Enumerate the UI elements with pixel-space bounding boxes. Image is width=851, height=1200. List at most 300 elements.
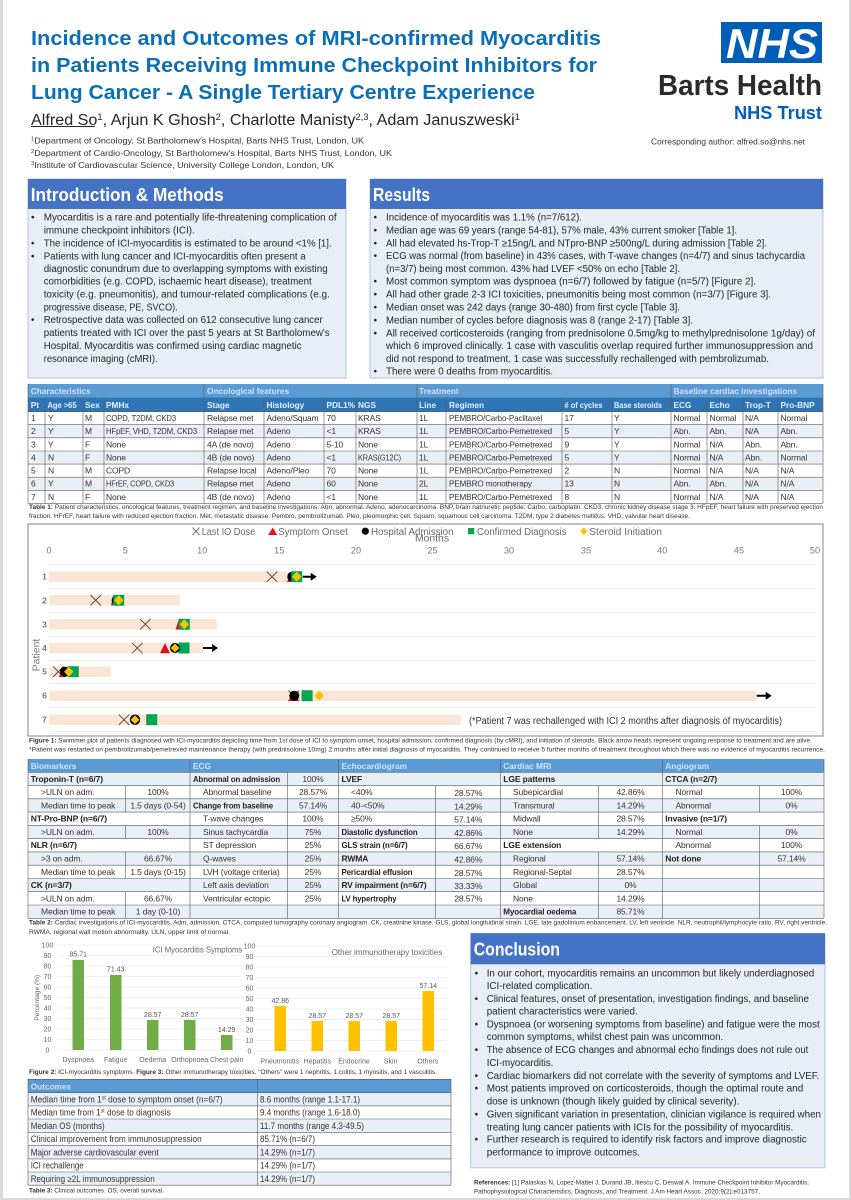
bullet list: conclusion: • bbox=[474, 994, 478, 1005]
bullet list: results bbox=[374, 213, 815, 378]
bar chart: other immunotherapy toxicities bbox=[244, 944, 447, 1066]
table 1 row: patient 2: N/A bbox=[745, 426, 759, 436]
table 1 row: patient 7: N/A bbox=[780, 492, 795, 502]
heading: conclusion: Conclusion bbox=[474, 940, 560, 960]
bullet list: results: Incidence of myocarditis was 1.1% (n=7/612). bbox=[386, 213, 582, 224]
bullet list: introduction: • bbox=[31, 213, 35, 224]
bullet list: introduction: • bbox=[31, 315, 35, 326]
swimmer row: patient 3 bbox=[49, 619, 217, 630]
bullet list: results: Median onset was 242 days (range 30-480) from first cycle [Table 3]. bbox=[386, 303, 680, 314]
table 1 row: patient 4: 4 bbox=[31, 452, 36, 462]
table 1 row: patient 3: 9 bbox=[564, 439, 570, 449]
table 1 group headers: Treatment bbox=[419, 386, 459, 396]
swimmer legend: Symptom Onset bbox=[278, 527, 348, 538]
table 2 column: ECG: Sinus tachycardia bbox=[203, 827, 268, 837]
table 2 column: echocardiogram: Diastolic dysfunction bbox=[342, 827, 418, 837]
table 2 column: cardiac MRI: LGE patterns bbox=[503, 774, 556, 784]
table 1 row: patient 6: 2L bbox=[419, 479, 429, 489]
table 1 column headers: PDL1% bbox=[326, 400, 356, 410]
table 1 row: patient 3: 1L bbox=[419, 439, 429, 449]
table 2 column: ECG bbox=[193, 774, 328, 903]
table 3 right column: 14.29% (n=1/7) bbox=[260, 1161, 315, 1171]
swimmer plot bbox=[28, 524, 823, 736]
bullet list: results: ECG was normal (from baseline) in 43% cases, with T-wave changes (n=4/7) and sinus tachycardia bbox=[386, 251, 805, 262]
table 1 row: patient 4: 5 bbox=[564, 452, 570, 462]
y axis labels chart 2: 30 bbox=[246, 1017, 253, 1024]
x axis labels: 20 bbox=[351, 546, 361, 556]
logo: NHS Barts Health: NHS bbox=[726, 20, 818, 67]
table 1 row: patient 7: N/A bbox=[710, 492, 724, 502]
table 1 row: patient 2: M bbox=[85, 426, 92, 436]
y axis labels: 2 bbox=[42, 595, 47, 605]
table 1 row: patient 6: N bbox=[614, 479, 620, 489]
table 1 row: patient 4: Y bbox=[614, 452, 620, 462]
table 3 header: Outcomes bbox=[31, 1082, 72, 1092]
table 1 row: patient 2: Abn. bbox=[674, 426, 691, 436]
table 1 row: patient 7: None bbox=[358, 492, 378, 502]
bullet list: conclusion: patient characteristics were varied. bbox=[487, 1007, 638, 1018]
swimmer row: patient 4 bbox=[49, 642, 218, 654]
table 2 column: cardiac MRI: LGE extension bbox=[503, 840, 561, 850]
table 2 section headers: Cardiac MRI bbox=[503, 761, 551, 771]
authors: 2,3 bbox=[355, 112, 369, 122]
bullet list: results: • bbox=[374, 367, 378, 378]
table 1 row: patient 7: 1L bbox=[419, 492, 429, 502]
table 2 column: biomarkers: 100% bbox=[147, 827, 169, 837]
table 1 row: patient 6: HFrEF, COPD, CKD3 bbox=[106, 479, 174, 489]
table 1 row: patient 5: Normal bbox=[674, 466, 700, 476]
bullet list: results: All had other grade 2-3 ICI toxicities, pneumonitis being most common (n=3/7) [Figure 3]. bbox=[386, 290, 771, 301]
y axis labels chart 1: 50 bbox=[44, 995, 51, 1002]
bullet list: conclusion: • bbox=[474, 1135, 478, 1146]
affiliations: 1 bbox=[31, 136, 34, 142]
bullet list: results: • bbox=[374, 277, 378, 288]
y axis labels: 6 bbox=[42, 691, 47, 701]
table 3 right column: 9.4 months (range 1.6-18.0) bbox=[260, 1108, 360, 1118]
bullet list: introduction: comorbidities (e.g. COPD, ischaemic heart disease), treatment bbox=[44, 277, 312, 288]
bullet list: conclusion: ICI-related complication. bbox=[487, 981, 592, 992]
table 1 row: patient 4: PEMBRO/Carbo-Pemetrexed bbox=[449, 452, 552, 462]
bullet list: conclusion: Further research is required to identify risk factors and improve diagnostic bbox=[487, 1135, 807, 1146]
table 2 column: angiogram: Normal bbox=[676, 787, 702, 797]
table 1 row: patient 6: 13 bbox=[564, 479, 574, 489]
table 1 row: patient 4: 4B (de novo) bbox=[207, 452, 255, 462]
table 1 row: patient 3: Normal bbox=[674, 439, 700, 449]
chart 2 category labels: Endocrine bbox=[338, 1058, 370, 1066]
table 2 column: ECG: 75% bbox=[305, 827, 322, 837]
table 2 column: echocardiogram: 40-<50% bbox=[351, 800, 385, 810]
chart 2 category labels: Others bbox=[417, 1058, 439, 1066]
table 1 row: patient 3: Abn. bbox=[780, 439, 798, 449]
affiliations bbox=[31, 136, 392, 170]
bullet list: introduction: The incidence of ICI-myocarditis is estimated to be around <1% [1]. bbox=[44, 239, 332, 250]
bullet list: results: • bbox=[374, 238, 378, 249]
table 1 row: patient 7: N bbox=[48, 492, 54, 502]
bullet list: results: All received corticosteroids (ranging from prednisolone 0.5mg/kg to methylprednisolone 1g/day) of bbox=[386, 328, 815, 339]
table 2 column: cardiac MRI: None bbox=[513, 893, 533, 903]
table 1 row: patient 1: KRAS bbox=[358, 413, 381, 423]
table 2 column: angiogram: 100% bbox=[781, 787, 803, 797]
table 1 row: patient 7: PEMBRO/Carbo-Pemetrexed bbox=[449, 492, 552, 502]
x axis labels: 25 bbox=[427, 546, 438, 556]
logo: NHS Barts Health: NHS Trust bbox=[734, 103, 822, 123]
table 2 column: cardiac MRI: Subepicardial bbox=[513, 787, 563, 797]
table 3 left column: Requiring ≥2L immunosuppression bbox=[31, 1174, 155, 1184]
bullet list: introduction: Myocarditis is a rare and potentially life-threatening complication of bbox=[44, 213, 337, 224]
table 1 row: patient 7: F bbox=[85, 492, 90, 502]
x axis labels: 35 bbox=[581, 546, 591, 556]
table 1 row: patient 3: Abn. bbox=[745, 439, 762, 449]
panel: conclusion bbox=[471, 933, 825, 1168]
swimmer legend bbox=[192, 527, 662, 538]
table 2 column: ECG: 25% bbox=[305, 893, 322, 903]
bullet list: conclusion: common symptoms, whilst chest pain was uncommon. bbox=[487, 1032, 723, 1043]
table 2 section headers: Angiogram bbox=[665, 761, 709, 771]
chart 1 category labels: Orthopnoea bbox=[171, 1057, 208, 1064]
bullet list: results: • bbox=[374, 213, 378, 224]
authors bbox=[31, 112, 520, 129]
table 2 column: ECG: LVH (voltage criteria) bbox=[203, 867, 280, 877]
table 2 column: echocardiogram: 28.57% bbox=[454, 893, 483, 903]
table 2 column: biomarkers: Median time to peak bbox=[41, 800, 116, 810]
y axis labels chart 2: 90 bbox=[246, 954, 253, 961]
chart 2 value labels bbox=[272, 983, 437, 1020]
table 1 row: patient 6: N/A bbox=[780, 479, 795, 489]
table 1 row: patient 5: M bbox=[85, 466, 92, 476]
table 1 column headers bbox=[31, 400, 815, 410]
table 3 left column: Median time from 1 bbox=[31, 1094, 106, 1104]
table 3: clinical outcomes bbox=[28, 1079, 451, 1185]
table 1 row: patient 1: M bbox=[85, 413, 92, 423]
table 1 row: patient 6: 6 bbox=[31, 479, 36, 489]
bullet list: conclusion: Dyspnoea (or worsening symptoms from baseline) and fatigue were the most bbox=[487, 1020, 820, 1031]
chart 2 value labels: 28.57 bbox=[346, 1013, 363, 1020]
x axis labels: 5 bbox=[123, 546, 128, 556]
table 1 row: patient 6: Relapse met bbox=[207, 479, 254, 489]
table 1 row: patient 5: Relapse local bbox=[207, 466, 257, 476]
table 2 column: angiogram: Invasive (n=1/7) bbox=[665, 814, 727, 824]
table 1 row: patient 6: N/A bbox=[745, 479, 759, 489]
table 3 left column: st bbox=[102, 1096, 106, 1102]
table 1 group headers: Characteristics bbox=[31, 386, 91, 396]
bullet list: results: which 6 improved clinically. 1 case with vasculitis overlap required further immunosuppression and bbox=[385, 341, 813, 352]
table 1 row: patient 5: 2 bbox=[564, 466, 570, 476]
corresponding author: Corresponding author: alfred.so@nhs.net bbox=[651, 136, 806, 146]
table 2 column: biomarkers: 66.67% bbox=[144, 854, 173, 864]
table 2 column: biomarkers: Median time to peak bbox=[41, 907, 116, 917]
table 1 row: patient 5: 5 bbox=[31, 466, 36, 476]
table 2 column: angiogram: 0% bbox=[785, 827, 798, 837]
table 2 column: angiogram: Abnormal bbox=[676, 800, 711, 810]
table 1 row: patient 5: N/A bbox=[710, 466, 724, 476]
table 2 column: cardiac MRI: 28.57% bbox=[616, 814, 645, 824]
y axis labels chart 2: 80 bbox=[246, 964, 253, 972]
table 1 row: patient 6: Abn. bbox=[674, 479, 691, 489]
y axis labels chart 1: 30 bbox=[44, 1016, 51, 1023]
y axis labels chart 1: 90 bbox=[44, 953, 51, 960]
y axis labels chart 1: 0 bbox=[46, 1048, 50, 1054]
bullet list: conclusion: • bbox=[474, 1083, 478, 1094]
y axis labels: 7 bbox=[42, 715, 47, 725]
table 1 row: patient 3: 5-10 bbox=[326, 439, 343, 449]
chart 2 value labels: 28.57 bbox=[383, 1013, 400, 1020]
table 2 column: echocardiogram: 66.67% bbox=[454, 841, 483, 851]
affiliations: 3 bbox=[31, 161, 34, 167]
swimmer row: patient 5 bbox=[49, 666, 111, 677]
table 2 column: echocardiogram: LVEF bbox=[342, 774, 362, 784]
logo: NHS Barts Health: Barts Health bbox=[658, 70, 822, 102]
bullet list: results: • bbox=[374, 251, 378, 262]
table 1 column headers: PMHx bbox=[106, 400, 129, 410]
y axis labels chart 1: 80 bbox=[44, 964, 51, 970]
table 2 column: biomarkers: >ULN on adm. bbox=[41, 893, 95, 903]
table 1 row: patient 2: Y bbox=[614, 426, 620, 436]
bullet list: conclusion: Cardiac biomarkers did not correlate with the severity of symptoms and LVEF. bbox=[487, 1071, 819, 1082]
table 3 left column: dose to diagnosis bbox=[105, 1108, 171, 1118]
y axis labels: 3 bbox=[42, 619, 47, 629]
table 1 row: patient 1: Y bbox=[48, 413, 54, 423]
table 1 row: patient 2: PEMBRO/Carbo-Pemetrexed bbox=[449, 426, 552, 436]
table 2 column: cardiac MRI: Midwall bbox=[513, 814, 541, 824]
table 1 row: patient 5: PEMBRO/Carbo-Pemetrexed bbox=[449, 466, 552, 476]
bullet list: results: • bbox=[374, 315, 378, 326]
bullet list: results: Most common symptom was dyspnoea (n=6/7) followed by fatigue (n=5/7) [Figure 2]. bbox=[386, 277, 756, 288]
table 2 column: cardiac MRI: Myocardial oedema bbox=[503, 907, 577, 917]
y axis labels chart 1: 60 bbox=[44, 984, 51, 992]
table 2 column: angiogram: 0% bbox=[785, 800, 798, 810]
table 1 row: patient 1: PEMBRO/Carbo-Paclitaxel bbox=[449, 413, 542, 423]
authors: Alfred So bbox=[31, 112, 95, 129]
table 2 column: echocardiogram: 42.86% bbox=[454, 854, 483, 864]
table 1 row: patient 3: PEMBRO/Carbo-Pemetrexed bbox=[449, 439, 552, 449]
table 2 column: angiogram bbox=[665, 774, 806, 864]
table 2 column: ECG: Ventricular ectopic bbox=[203, 893, 271, 903]
table 1 row: patient 4: KRAS(G12C) bbox=[358, 452, 401, 462]
table 2 column: angiogram: 100% bbox=[781, 840, 803, 850]
chart 1 category labels: Fatigue bbox=[104, 1057, 127, 1064]
table 1 row: patient 2: Relapse met bbox=[207, 426, 254, 436]
table 1 row: patient 6: PEMBRO monotherapy bbox=[449, 479, 533, 489]
chart 1 title: ICI Myocarditis Symptoms bbox=[153, 944, 242, 954]
table 2 column: angiogram: Normal bbox=[676, 827, 702, 837]
bullet list: conclusion: In our cohort, myocarditis remains an uncommon but likely underdiagnosed bbox=[487, 969, 815, 980]
table 2 column: cardiac MRI: 0% bbox=[624, 880, 637, 890]
swimmer row: patient 2 bbox=[49, 595, 180, 606]
table 1 group headers: Baseline cardiac investigations bbox=[674, 386, 797, 396]
table 1 column headers: NGS bbox=[358, 400, 376, 410]
title: in Patients Receiving Immune Checkpoint Inhibitors for bbox=[31, 54, 597, 77]
logo: NHS Barts Health bbox=[658, 20, 822, 123]
table 1 row: patient 1: 17 bbox=[564, 413, 574, 423]
table 2 column: ECG: Left axis deviation bbox=[203, 880, 269, 890]
title: Incidence and Outcomes of MRI-confirmed Myocarditis bbox=[31, 27, 601, 50]
chart 1 category labels: Dyspnoea bbox=[63, 1057, 94, 1064]
table 1 row: patient 1: COPD, T2DM, CKD3 bbox=[106, 413, 176, 423]
figures 2 and 3 caption: Figure 2: ICI-myocarditis symptoms. Figure 3: Other immunotherapy toxicities. "Others" were 1 nephritis, 1 colitis, 1 myositis, and 1 vasculitis. bbox=[29, 1069, 437, 1076]
table 1 group headers bbox=[31, 386, 797, 396]
table 2 column: biomarkers: 66.67% bbox=[144, 893, 173, 903]
y axis labels chart 1: 20 bbox=[44, 1026, 51, 1034]
table 1 column headers: Pt bbox=[31, 400, 39, 410]
chart 1 value labels: 14.29 bbox=[218, 1027, 236, 1034]
table 2 column: biomarkers: NT-Pro-BNP (n=6/7) bbox=[31, 814, 107, 824]
chart 2 value labels: 42.86 bbox=[272, 998, 289, 1005]
x axis labels: 40 bbox=[657, 546, 667, 556]
bullet list: results: • bbox=[374, 290, 378, 301]
x axis labels: 10 bbox=[197, 546, 207, 556]
table 2 column: biomarkers: NLR (n=6/7) bbox=[31, 840, 77, 850]
y axis labels chart 2: 20 bbox=[246, 1028, 253, 1034]
table 1 row: patient 4: None bbox=[106, 452, 126, 462]
table 1 row: patient 6: 60 bbox=[326, 479, 336, 489]
panel: introduction and methods bbox=[28, 179, 346, 378]
table 2 column: echocardiogram: RWMA bbox=[342, 854, 368, 864]
chart 1 category labels: Oedema bbox=[139, 1057, 166, 1064]
bullet list: introduction: diagnostic conundrum due to overlapping symptoms with existing bbox=[44, 264, 328, 275]
table 1 row: patient 4 bbox=[31, 452, 807, 462]
table 2 column: echocardiogram: <40% bbox=[351, 787, 373, 797]
table 2 section headers: Echocardiogram bbox=[342, 761, 407, 771]
table 1 column headers: Regimen bbox=[449, 400, 484, 410]
table 2 column: cardiac MRI: Regional-Septal bbox=[513, 867, 572, 877]
swimmer row: patient 7 bbox=[49, 714, 461, 725]
table 2 column: cardiac MRI bbox=[503, 774, 645, 917]
affiliations: 2 bbox=[31, 149, 34, 155]
table 1 row: patient 3: Y bbox=[48, 439, 54, 449]
table 2 column: cardiac MRI: 14.29% bbox=[616, 827, 645, 837]
table 1 column headers: ECG bbox=[674, 400, 691, 410]
table 1 caption: fraction. HFrEF, heart failure with reduced ejection fraction. Met, metastatic disease. Pembro, pembrolizumab. Pleo, pleomorphic cell. Squam, squamous cell carcinoma. T2DM, type 2 diabetes mellitus. VHD, valvular heart disease. bbox=[29, 513, 690, 520]
y axis labels bbox=[42, 572, 47, 725]
table 1 row: patient 7: N bbox=[614, 492, 620, 502]
table 1 column headers: Pro-BNP bbox=[780, 400, 815, 410]
table 1 row: patient 2: 5 bbox=[564, 426, 570, 436]
table 1 row: patient 4: 1L bbox=[419, 452, 429, 462]
y axis labels chart 2: 50 bbox=[246, 996, 253, 1003]
table 2 column: ECG: Abnormal baseline bbox=[203, 787, 272, 797]
table 2 column: cardiac MRI: 57.14% bbox=[616, 854, 645, 864]
y axis labels chart 2: 70 bbox=[246, 975, 253, 982]
y axis labels chart 2: 0 bbox=[248, 1048, 252, 1056]
references bbox=[474, 1180, 809, 1195]
heading: results: Results bbox=[373, 185, 430, 205]
table 1 row: patient 1: N/A bbox=[745, 413, 759, 423]
y axis labels chart 1: 40 bbox=[44, 1006, 51, 1012]
chart 2 title: Other immunotherapy toxicities bbox=[332, 947, 442, 957]
chart 1 bars bbox=[72, 960, 232, 1050]
x axis title: months: Months bbox=[415, 534, 449, 544]
table 1 row: patient 4: Normal bbox=[780, 452, 807, 462]
table 1 row: patient 5: None bbox=[358, 466, 378, 476]
table 1 row: patient 5: N/A bbox=[745, 466, 759, 476]
chart 2 value labels: 28.57 bbox=[309, 1013, 326, 1020]
bullet list: conclusion: ICI-myocarditis. bbox=[487, 1058, 553, 1069]
table 2 column: biomarkers: >ULN on adm. bbox=[41, 787, 95, 797]
table 1 row: patient 5: 70 bbox=[326, 466, 336, 476]
table 1 row: patient 2: 1L bbox=[419, 426, 429, 436]
table 3 left column: ICI rechallenge bbox=[31, 1161, 84, 1171]
table 2 column: angiogram: Abnormal bbox=[676, 840, 711, 850]
table 1 column headers: Line bbox=[419, 400, 436, 410]
table 2 column: ECG: 25% bbox=[305, 854, 322, 864]
bullet list: introduction bbox=[31, 213, 337, 365]
table 2 column: biomarkers: >ULN on adm. bbox=[41, 827, 95, 837]
table 2 column: angiogram: CTCA (n=2/7) bbox=[665, 774, 717, 784]
table 2 caption: RWMA, regional wall motion abnormality. ULN, upper limit of normal. bbox=[29, 929, 230, 936]
table 1 row: patient 1: Adeno/Squam bbox=[266, 413, 319, 423]
table 3 right column bbox=[260, 1094, 364, 1184]
table 1 row: patient 2 bbox=[31, 426, 798, 436]
bullet list: results: There were 0 deaths from myocarditis. bbox=[386, 367, 553, 378]
table 3 left column: Major adverse cardiovascular event bbox=[31, 1147, 159, 1157]
table 1 row: patient 2: Abn. bbox=[710, 426, 727, 436]
chart 2 category labels: Hepatitis bbox=[304, 1058, 331, 1066]
bullet list: introduction: resonance imaging (cMRI). bbox=[44, 354, 158, 365]
chart 2 value labels: 57.14 bbox=[420, 983, 437, 990]
bullet list: introduction: Patients with lung cancer and ICI-myocarditis often present a bbox=[44, 251, 306, 262]
table 2 column: angiogram: 57.14% bbox=[777, 854, 806, 864]
table 1 row: patient 2: HFpEF, VHD, T2DM, CKD3 bbox=[106, 426, 197, 436]
table 2 column: echocardiogram: 57.14% bbox=[454, 815, 483, 825]
bullet list: results: • bbox=[374, 328, 378, 339]
table 2 column: biomarkers: Troponin-T (n=6/7) bbox=[31, 774, 103, 784]
table 2 column: biomarkers: >3 on adm. bbox=[41, 854, 83, 864]
table 2 column: ECG: 25% bbox=[305, 867, 322, 877]
table 1 row: patient 5: N bbox=[614, 466, 620, 476]
bullet list: results: • bbox=[374, 225, 378, 236]
table 1: patient characteristics bbox=[28, 384, 823, 503]
y axis labels: 1 bbox=[42, 572, 47, 582]
bullet list: conclusion: • bbox=[474, 1045, 478, 1056]
table 1 row: patient 3: N/A bbox=[710, 439, 724, 449]
authors: , Charlotte Manisty bbox=[221, 112, 356, 129]
table 1 row: patient 2: 2 bbox=[31, 426, 36, 436]
table 1 row: patient 1: Relapse met bbox=[207, 413, 254, 423]
bullet list: conclusion: • bbox=[474, 1071, 478, 1082]
table 1 row: patient 7: N/A bbox=[745, 492, 759, 502]
bullet list: results: All had elevated hs-Trop-T ≥15ng/L and NTpro-BNP ≥500ng/L during admission [Table 2]. bbox=[386, 238, 767, 249]
table 1 row: patient 1: Normal bbox=[780, 413, 807, 423]
table 1 row: patient 1 bbox=[31, 413, 807, 423]
bullet list: conclusion: • bbox=[474, 969, 478, 980]
table 1 row: patient 6 bbox=[31, 479, 795, 489]
table 2 column: biomarkers: 100% bbox=[147, 787, 169, 797]
swimmer legend: Confirmed Diagnosis bbox=[477, 527, 566, 538]
table 2 column: ECG: ST depression bbox=[203, 840, 256, 850]
table 2 column: echocardiogram: 33.33% bbox=[454, 881, 483, 891]
table 2 column: ECG: 25% bbox=[305, 880, 322, 890]
table 1 row: patient 1: Normal bbox=[674, 413, 700, 423]
table 2 column: echocardiogram: 42.86% bbox=[454, 828, 483, 838]
table 1 row: patient 3: F bbox=[85, 439, 90, 449]
references: References: [1] Palaskas N, Lopez-Mattei J, Durand JB, Iliescu C, Deswal A. Immune Checkpoint Inhibitor Myocarditis: bbox=[474, 1180, 809, 1186]
table 2 column: ECG: 28.57% bbox=[299, 787, 328, 797]
figure 1 caption: Figure 1: Swimmer plot of patients diagnosed with ICI-myocarditis depicting time from 1st dose of ICI to symptom onset, hospital admission, confirmed diagnosis (by cMRI), and initiation of steroids. Black arrow heads represent ongoing response to treatment and are alive. bbox=[29, 738, 812, 744]
x axis labels: 45 bbox=[734, 546, 744, 556]
bullet list: introduction: immune checkpoint inhibitors (ICI). bbox=[44, 226, 195, 237]
table 1 row: patient 2: <1 bbox=[326, 426, 336, 436]
table 2 column: cardiac MRI: Regional bbox=[513, 854, 546, 864]
table 1 row: patient 3: 4A (de novo) bbox=[207, 439, 254, 449]
table 1 row: patient 5: Adeno/Pleo bbox=[266, 466, 310, 476]
authors: 1 bbox=[515, 112, 520, 122]
y axis labels chart 2: 100 bbox=[244, 944, 255, 950]
table 1 row: patient 3 bbox=[31, 439, 798, 449]
table 1 column headers: Histology bbox=[266, 400, 305, 410]
bullet list: introduction: toxicity (e.g. pneumonitis), and tumour-related complications (e.g. bbox=[44, 289, 330, 300]
table 1 caption bbox=[29, 504, 823, 520]
bullet list: conclusion: treating lung cancer patients with ICIs for the possibility of myocarditis. bbox=[487, 1122, 793, 1133]
